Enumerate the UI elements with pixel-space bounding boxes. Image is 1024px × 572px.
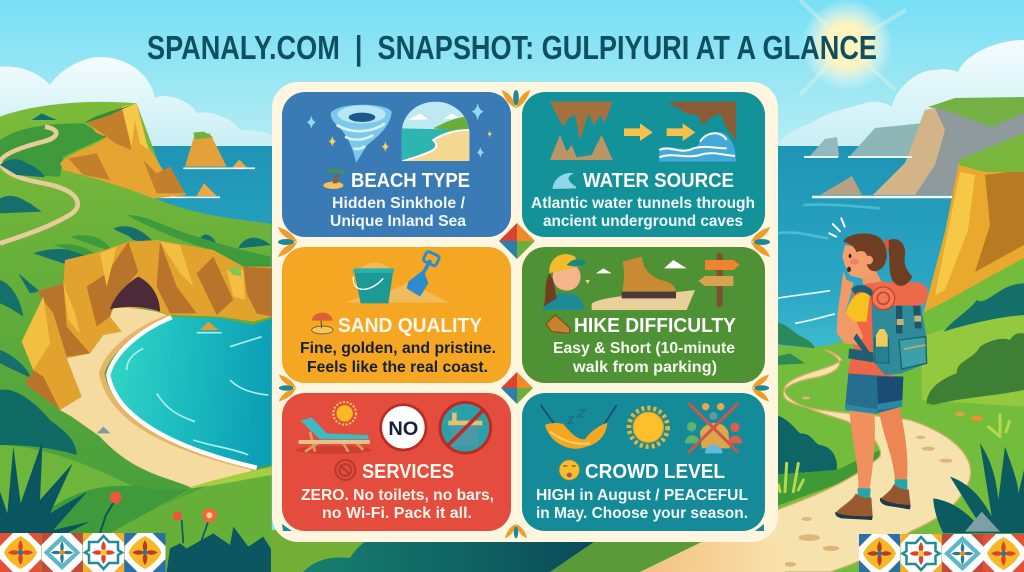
icon: prohibited — [335, 460, 355, 480]
foreground plants — [933, 443, 1024, 533]
sun — [800, 0, 906, 95]
icon: no sign: NO — [388, 419, 418, 440]
text: hike difficulty body — [553, 340, 735, 376]
icon: beach umbrella — [312, 313, 333, 334]
heading: water source: WATER SOURCE — [583, 169, 734, 192]
panel: services — [282, 393, 511, 531]
icon: sun lounger — [295, 402, 372, 454]
hiker head — [860, 267, 882, 284]
icon: whirlpool — [307, 103, 492, 163]
upper cliff — [60, 103, 187, 198]
title: SPANALY.COM | SNAPSHOT: GULPIYURI AT A GLANCE — [147, 29, 877, 66]
scene: right hills and path with hiker — [730, 205, 1024, 572]
text: water source body: Atlantic water tunnels through — [531, 195, 755, 212]
tile strip right — [859, 534, 1024, 572]
heading: services: SERVICES — [362, 460, 454, 483]
text: water source body — [531, 195, 755, 230]
clouds left — [0, 57, 275, 146]
icon: hiker, boot and signpost — [543, 253, 740, 310]
bottom ground band under panel — [271, 530, 785, 572]
text: sand quality body: Fine, golden, and pristine. — [300, 340, 496, 357]
small bushes — [0, 113, 271, 378]
text: beach type body — [330, 195, 466, 230]
scene: left coast and cove — [0, 102, 272, 572]
text: beach type body: Hidden Sinkhole / — [332, 195, 466, 212]
text: services body: ZERO. No toilets, no bars, — [301, 487, 494, 504]
hiker backpack — [872, 300, 927, 375]
hiker arm — [837, 271, 863, 345]
sea rocks — [185, 133, 227, 167]
left hill — [0, 102, 272, 572]
text: hike difficulty body: Easy & Short (10-minute — [553, 340, 735, 357]
foreground plants — [0, 440, 90, 533]
panel: beach type — [282, 92, 511, 237]
tile strip left — [0, 533, 166, 572]
icon: palm island — [323, 169, 344, 189]
text: sand quality body: Feels like the real coast. — [307, 359, 488, 376]
icon: sun — [629, 408, 668, 447]
hiker legs — [849, 410, 875, 490]
text: crowd level body: in May. Choose your season. — [536, 505, 748, 522]
hiker torso — [848, 281, 893, 377]
foreground hills — [0, 445, 193, 572]
text: services body: no Wi-Fi. Pack it all. — [322, 505, 472, 522]
winding trail — [0, 127, 78, 243]
heading: beach type: BEACH TYPE — [351, 169, 470, 192]
icon: no bar — [440, 402, 491, 453]
text: services body — [301, 487, 494, 522]
icon: crowd crossed out — [685, 403, 742, 453]
left dark bush — [0, 389, 77, 455]
icon: shushing face — [559, 460, 579, 480]
panel: hike difficulty — [522, 247, 765, 383]
icon: no sign — [381, 405, 426, 450]
heading: sand quality: SAND QUALITY — [338, 314, 482, 337]
panel: cream frame — [272, 82, 778, 542]
right hills — [770, 258, 1024, 572]
text: crowd level body: HIGH in August / PEACEFUL — [536, 487, 748, 504]
hiker bedroll — [873, 282, 928, 306]
text: sand quality body — [300, 340, 496, 376]
cove water — [108, 317, 272, 468]
text: water source body: ancient underground caves — [543, 213, 743, 230]
hiker woman — [835, 234, 928, 520]
text: beach type body: Unique Inland Sea — [330, 213, 466, 230]
icon: boot — [546, 315, 570, 333]
panel: water source — [522, 92, 765, 237]
scene: right far headlands and cliff — [804, 97, 1024, 315]
panel: sand quality — [282, 247, 511, 383]
cave — [110, 277, 160, 312]
text: hike difficulty body: walk from parking) — [572, 359, 717, 376]
sky background — [0, 0, 1024, 200]
trail — [730, 350, 971, 572]
panel ornaments — [278, 90, 770, 538]
cove cliffs — [22, 240, 272, 410]
hiker shorts — [845, 373, 903, 413]
icon: sand bucket and shovel — [345, 251, 448, 303]
bushes — [927, 333, 1024, 405]
sand beach — [60, 308, 257, 488]
icon: hammock — [541, 405, 617, 449]
icon: cave to sea — [550, 102, 736, 189]
text: crowd level body — [536, 487, 748, 522]
sea — [0, 146, 1024, 386]
hiker upper body — [837, 234, 928, 377]
hiker sleeve — [846, 293, 870, 322]
heading: hike difficulty: HIKE DIFFICULTY — [574, 314, 736, 337]
icon: beach dome — [402, 100, 470, 163]
clouds right — [775, 40, 1024, 146]
panel: crowd level — [522, 393, 765, 531]
heading: crowd level: CROWD LEVEL — [585, 460, 725, 483]
